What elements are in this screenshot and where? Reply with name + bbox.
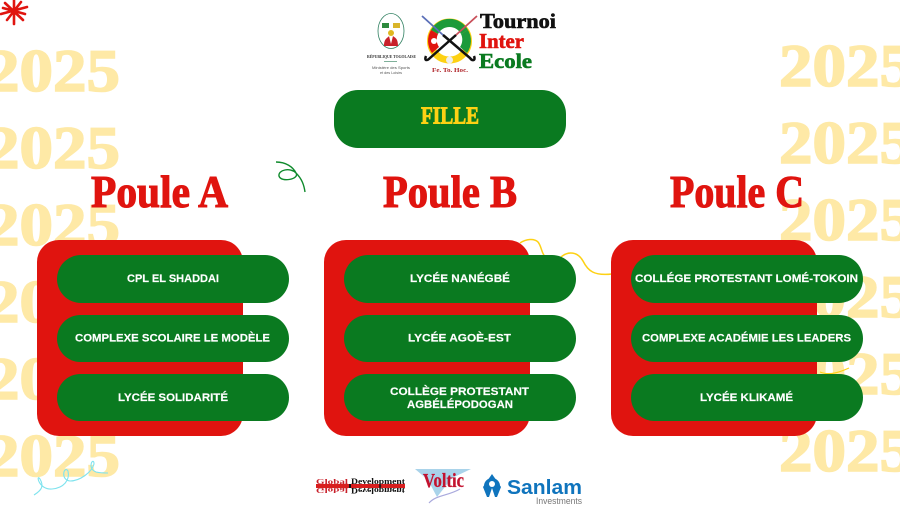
logo: Sanlam Investments: Investments bbox=[536, 496, 582, 506]
squiggle: teal bbox=[34, 461, 108, 495]
heading: FILLE: FILLE bbox=[421, 104, 479, 130]
background: 2025 watermark right column: 2025 bbox=[779, 33, 900, 99]
panel: Poule B: LYCÉE AGOÈ-EST bbox=[408, 332, 511, 344]
panel: Poule C: COLLÉGE PROTESTANT LOMÉ-TOKOIN bbox=[635, 272, 858, 285]
heading: Poule B: Poule B bbox=[383, 167, 517, 217]
panel: Poule C: LYCÉE KLIKAMÉ bbox=[700, 391, 793, 404]
logo: ministry of sports crest: et des Loisirs bbox=[380, 71, 402, 75]
background: 2025 watermark right column: 2025 bbox=[779, 187, 900, 253]
logo: hockey ring and sticks bbox=[422, 16, 477, 74]
logo text: Tournoi Inter Ecole: Ecole bbox=[479, 49, 532, 73]
logo: Voltic bbox=[415, 469, 471, 503]
logo: ministry of sports crest: Ministère des Sports bbox=[372, 66, 410, 70]
squiggle: yellow right bbox=[820, 368, 849, 374]
panel: Poule C bbox=[611, 240, 863, 436]
background: 2025 watermark right column: 2025 bbox=[779, 264, 900, 330]
logo text: Tournoi Inter Ecole: Tournoi bbox=[480, 9, 556, 33]
background: 2025 watermark right column: 2025 bbox=[779, 341, 900, 407]
squiggle: green bbox=[276, 162, 305, 192]
panel: Poule B bbox=[324, 240, 576, 436]
logo: Sanlam Investments: Sanlam bbox=[507, 477, 582, 499]
logo text: Tournoi Inter Ecole: Inter bbox=[479, 29, 524, 53]
logo: Global Development Group: Global bbox=[316, 486, 348, 494]
panel: Poule B: LYCÉE NANÉGBÉ bbox=[410, 272, 510, 285]
background: 2025 watermark right column: 2025 bbox=[779, 418, 900, 484]
logo: Global Development Group bbox=[316, 477, 405, 495]
logo: hockey ring and sticks: Fe. To. Hoc. bbox=[432, 68, 469, 74]
background: 2025 watermark right column: 2025 bbox=[779, 110, 900, 176]
logo: Voltic: Voltic bbox=[423, 470, 464, 492]
heading: FILLE bbox=[334, 90, 566, 148]
logo: Global Development Group: Global bbox=[316, 478, 348, 486]
heading: Poule A: Poule A bbox=[91, 167, 228, 217]
background: 2025 watermark left column bbox=[0, 38, 120, 489]
panel: Poule B: COLLÈGE PROTESTANT bbox=[390, 385, 529, 398]
background: 2025 watermark right column bbox=[779, 33, 900, 484]
logo: ministry of sports crest: RÉPUBLIQUE TOGOLAISE bbox=[367, 54, 416, 59]
squiggle: yellow bbox=[520, 239, 612, 274]
panel: Poule C: COMPLEXE ACADÉMIE LES LEADERS bbox=[642, 332, 851, 344]
icon: red star bbox=[1, 0, 27, 24]
panel: Poule A: CPL EL SHADDAI bbox=[127, 273, 219, 285]
panel: Poule B: AGBÉLÉPODOGAN bbox=[407, 398, 513, 411]
panel: Poule A bbox=[37, 240, 289, 436]
logo text: Tournoi Inter Ecole bbox=[479, 9, 556, 73]
logo: Global Development Group: Development bbox=[351, 486, 405, 495]
panel: Poule A: COMPLEXE SCOLAIRE LE MODÈLE bbox=[75, 332, 270, 344]
panel: Poule A: LYCÉE SOLIDARITÉ bbox=[118, 391, 228, 404]
heading: Poule C: Poule C bbox=[670, 167, 804, 217]
logo: ministry of sports crest bbox=[367, 14, 416, 75]
logo: Global Development Group: Development bbox=[351, 477, 405, 486]
logo: Sanlam Investments bbox=[483, 474, 582, 506]
